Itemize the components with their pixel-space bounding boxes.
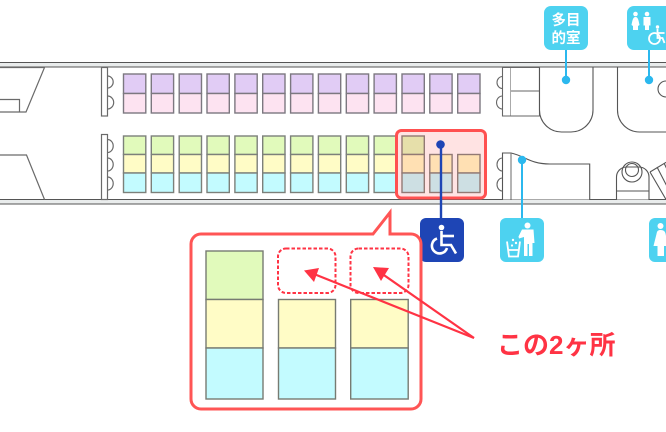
car walls [0, 62, 666, 204]
icon: multipurpose room: 的室 [552, 29, 580, 47]
upper seat rows [124, 74, 480, 113]
arrows [304, 267, 474, 338]
icon: trash bin [500, 156, 544, 262]
right end lower structures [497, 153, 666, 200]
icon: wheelchair [420, 140, 464, 262]
removed seat outline left [278, 248, 336, 293]
right end upper structures [497, 68, 666, 132]
highlight: wheelchair space [396, 130, 486, 198]
icon: multipurpose room [544, 6, 588, 84]
icon: multipurpose room: 多目 [552, 11, 580, 29]
lower seat rows [124, 136, 480, 192]
removed seat outline right [350, 248, 408, 293]
enlarged seat column 1 [206, 251, 263, 399]
enlarged seat column 2 [278, 300, 336, 399]
icon: accessible toilet [627, 6, 666, 84]
icon: women's toilet [649, 218, 666, 262]
enlarged seat column 3 [351, 300, 408, 399]
callout: enlarged seats [191, 212, 421, 409]
label: two places: この2ヶ所 [497, 330, 615, 360]
left end structures [0, 68, 114, 200]
